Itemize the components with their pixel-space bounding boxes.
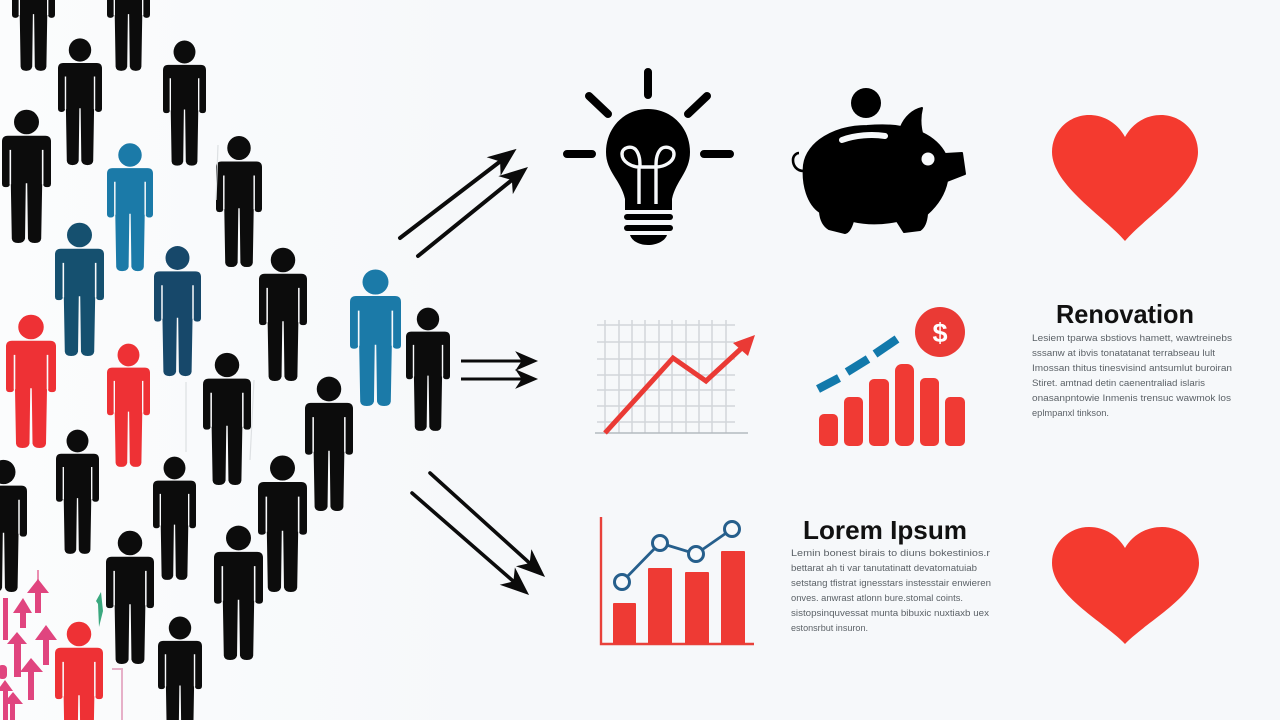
trend arrowhead [733, 335, 755, 356]
person: black left edge [0, 460, 27, 592]
chart line [622, 529, 732, 582]
person: black [58, 38, 102, 165]
person: red bottom [55, 622, 103, 720]
person: top left black [12, 0, 55, 71]
coin [851, 88, 881, 118]
dollar coin [915, 307, 965, 357]
person: black front [406, 308, 450, 431]
text block: Lorem Ipsum body: sistopsinquvessat munta bibuxic nuxtiaxb uex [791, 608, 989, 619]
person: black [305, 377, 353, 511]
person: blue [107, 143, 153, 271]
person: black [258, 455, 307, 592]
icon: piggy bank [793, 88, 965, 233]
bar chart with coin [818, 307, 965, 446]
pig body [804, 108, 965, 233]
text block: Renovation body: onasanpntowie Inmenis trensuc wawmok los [1032, 393, 1231, 404]
text block: Lorem Ipsum body: estonsrbut insuron. [791, 623, 868, 634]
text block: Renovation body: Imossan thitus tinesvisind antsumlut buroiran [1032, 363, 1232, 374]
chart line points [614, 522, 740, 590]
line chart with grid [595, 320, 755, 433]
text block: Lorem Ipsum body [791, 548, 991, 634]
text block: Renovation body: sssanw at ibvis tonatatanat terrabseau lult [1032, 348, 1215, 359]
text block: Lorem Ipsum body: setstang tfistrat ignesstars instesstair enwieren [791, 578, 991, 589]
arrows: lower pair [412, 473, 538, 588]
bars [819, 364, 965, 446]
filament [622, 147, 674, 204]
blue dashes [818, 339, 897, 389]
teal spark [96, 592, 103, 627]
person: red [107, 344, 150, 467]
icon: heart top [1052, 115, 1198, 241]
person: black [163, 40, 206, 166]
icon: heart bottom [1052, 527, 1199, 644]
text block: Lorem Ipsum body: Lemin bonest birais to diuns bokestinios.r [791, 548, 991, 559]
heading: Lorem Ipsum: Lorem Ipsum [803, 515, 967, 545]
person: black [214, 526, 263, 660]
person: dark blue [154, 246, 201, 376]
person: black [259, 248, 307, 381]
arrows: middle pair [461, 361, 528, 379]
pig tail [793, 153, 804, 171]
person: blue front [350, 269, 401, 406]
dollar sign: $ [932, 318, 948, 348]
chart bars [613, 551, 745, 644]
arrows: upper pair [400, 155, 520, 256]
axis baseline [595, 432, 748, 434]
bulb base [624, 214, 673, 245]
person: black [106, 531, 154, 664]
pink up arrows [0, 570, 57, 720]
text block: Renovation body [1032, 333, 1232, 419]
mixed bar and line chart [601, 517, 754, 644]
text block: Renovation body: Stiret. amtnad detin caenentraliad islaris [1032, 378, 1205, 389]
text block: Renovation body: Lesiem tparwa sbstiovs hamett, wawtreinebs [1032, 333, 1232, 344]
person: black [203, 353, 251, 485]
person: dark blue [55, 223, 104, 356]
person: top black [107, 0, 150, 71]
person: black [2, 110, 51, 243]
person: black bottom [158, 616, 202, 720]
person: red [6, 315, 56, 448]
bulb glass [606, 109, 690, 210]
person: black [216, 136, 262, 267]
icon: light bulb [567, 72, 730, 245]
pale pink bracket [112, 669, 122, 720]
text block: Renovation body: eplmpanxl tinkson. [1032, 408, 1109, 419]
text block: Lorem Ipsum body: bettarat ah ti var tanutatinatt devatomatuiab [791, 563, 977, 574]
person: black [153, 457, 196, 580]
person: black [56, 430, 99, 554]
heading: Renovation: Renovation [1056, 299, 1194, 329]
text block: Lorem Ipsum body: onves. anwrast atlonn bure.stomal coints. [791, 593, 963, 604]
pig slot [842, 135, 885, 140]
crowd of people [0, 0, 450, 720]
trend line [605, 345, 745, 433]
bulb rays [567, 72, 730, 154]
pig eye [922, 152, 934, 166]
chart axes [601, 517, 754, 644]
